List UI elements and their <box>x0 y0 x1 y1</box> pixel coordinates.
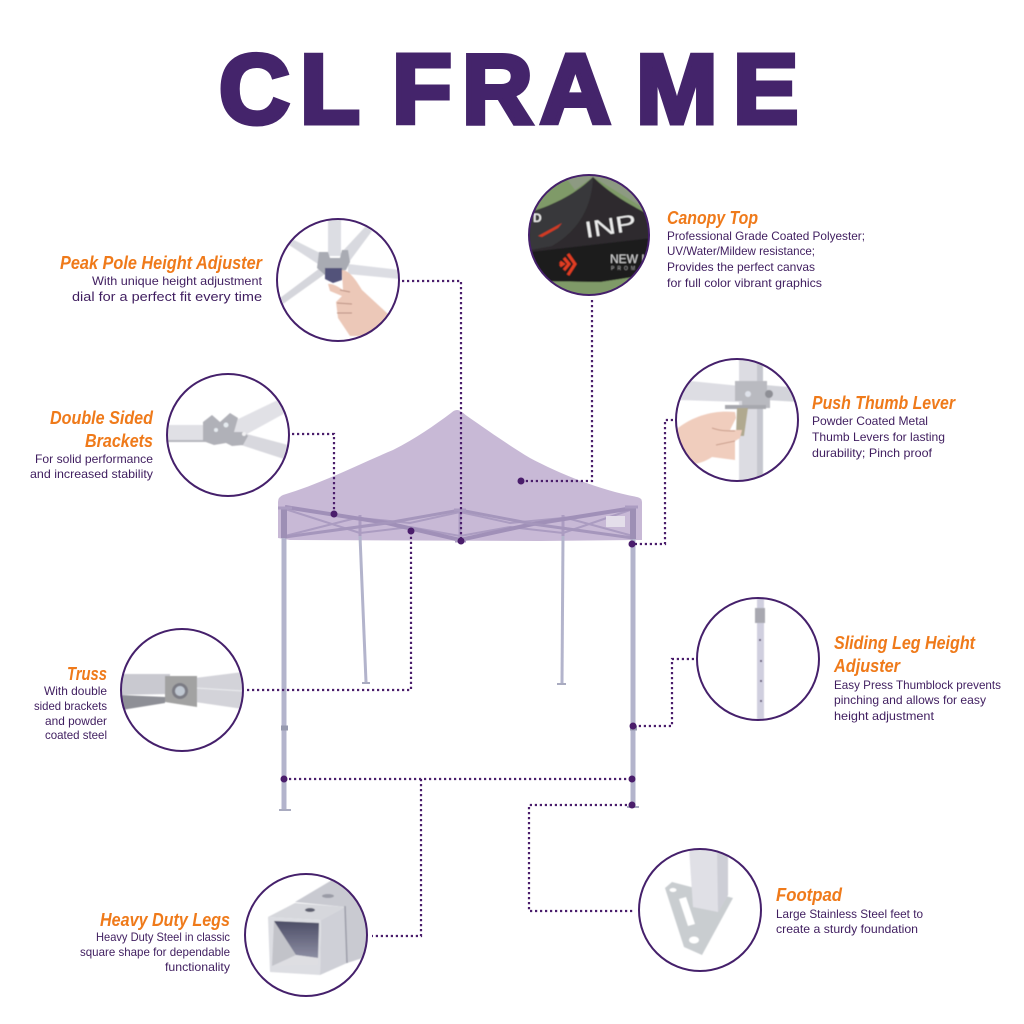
text: double sided brackets: and increased stability <box>30 467 153 481</box>
title: CL FRAME <box>219 34 798 144</box>
text: canopy top: for full color vibrant graphics <box>667 276 822 290</box>
icon: canopy top photo: D <box>533 211 542 225</box>
text: canopy top: UV/Water/Mildew resistance; <box>667 244 815 258</box>
text: push thumb lever: Push Thumb Lever <box>812 393 956 413</box>
tent window <box>606 516 625 527</box>
connector: sliding leg <box>630 659 694 730</box>
text: double sided brackets <box>30 408 154 481</box>
icon: canopy top photo <box>528 174 650 296</box>
tent canopy <box>278 410 642 541</box>
icon: double sided brackets photo <box>165 374 289 496</box>
icon: truss photo <box>120 629 243 751</box>
text: sliding leg height adjuster <box>833 633 1001 723</box>
icon: heavy duty leg photo <box>245 868 372 996</box>
text: footpad: create a sturdy foundation <box>776 922 918 936</box>
icon: footpad photo <box>639 848 761 971</box>
connector: canopy <box>518 300 592 484</box>
text: canopy top: Canopy Top <box>667 208 758 228</box>
text: heavy duty legs: Heavy Duty Legs <box>100 910 230 930</box>
text: footpad: Large Stainless Steel feet to <box>776 907 923 921</box>
text: push thumb lever <box>812 393 956 460</box>
text: truss <box>34 664 107 742</box>
connector: thumb lever <box>628 420 673 548</box>
text: truss: With double <box>44 684 107 698</box>
truss frame <box>278 507 638 541</box>
connector: footpad <box>529 802 636 911</box>
connector: heavy duty legs <box>280 776 636 936</box>
text: heavy duty legs <box>80 910 230 974</box>
icon: canopy top photo: PROM <box>611 266 638 272</box>
text: truss: coated steel <box>45 728 107 742</box>
text: canopy top: Provides the perfect canvas <box>667 260 815 274</box>
text: sliding leg height adjuster: height adjustment <box>834 709 935 723</box>
text: push thumb lever: Thumb Levers for lasting <box>812 430 945 444</box>
text: peak pole height adjuster <box>60 253 263 304</box>
text: truss: and powder <box>45 714 107 728</box>
icon: canopy top photo: NEW HO <box>610 252 659 266</box>
icon: sliding leg photo <box>697 595 819 725</box>
text: truss: Truss <box>67 664 107 684</box>
text: heavy duty legs: functionality <box>165 960 230 974</box>
text: push thumb lever: durability; Pinch proof <box>812 446 933 460</box>
icon: peak pole photo <box>277 215 400 341</box>
text: peak pole height adjuster: dial for a perfect fit every time <box>72 289 262 304</box>
text: peak pole height adjuster: With unique height adjustment <box>92 274 263 288</box>
connector: truss <box>247 528 414 690</box>
text: sliding leg height adjuster: pinching and allows for easy <box>834 693 986 707</box>
text: double sided brackets: Brackets <box>85 431 153 451</box>
text: footpad <box>776 885 923 936</box>
icon: canopy top photo: INP <box>583 209 638 243</box>
text: canopy top <box>667 208 865 290</box>
text: footpad: Footpad <box>776 885 843 905</box>
text: sliding leg height adjuster: Sliding Leg Height <box>834 633 976 653</box>
text: double sided brackets: Double Sided <box>50 408 154 428</box>
text: sliding leg height adjuster: Adjuster <box>833 656 901 676</box>
text: heavy duty legs: Heavy Duty Steel in classic <box>96 930 230 944</box>
text: double sided brackets: For solid performance <box>35 452 153 466</box>
text: sliding leg height adjuster: Easy Press Thumblock prevents <box>834 678 1001 692</box>
connector: peak pole <box>402 281 464 544</box>
text: heavy duty legs: square shape for dependable <box>80 945 230 959</box>
text: peak pole height adjuster: Peak Pole Height Adjuster <box>60 253 263 273</box>
icon: thumb lever photo <box>675 355 800 485</box>
connector: brackets <box>292 434 338 518</box>
text: truss: sided brackets <box>34 699 107 713</box>
tent legs <box>279 536 639 810</box>
text: push thumb lever: Powder Coated Metal <box>812 414 928 428</box>
text: canopy top: Professional Grade Coated Polyester; <box>667 229 865 243</box>
tent illustration <box>278 410 642 810</box>
